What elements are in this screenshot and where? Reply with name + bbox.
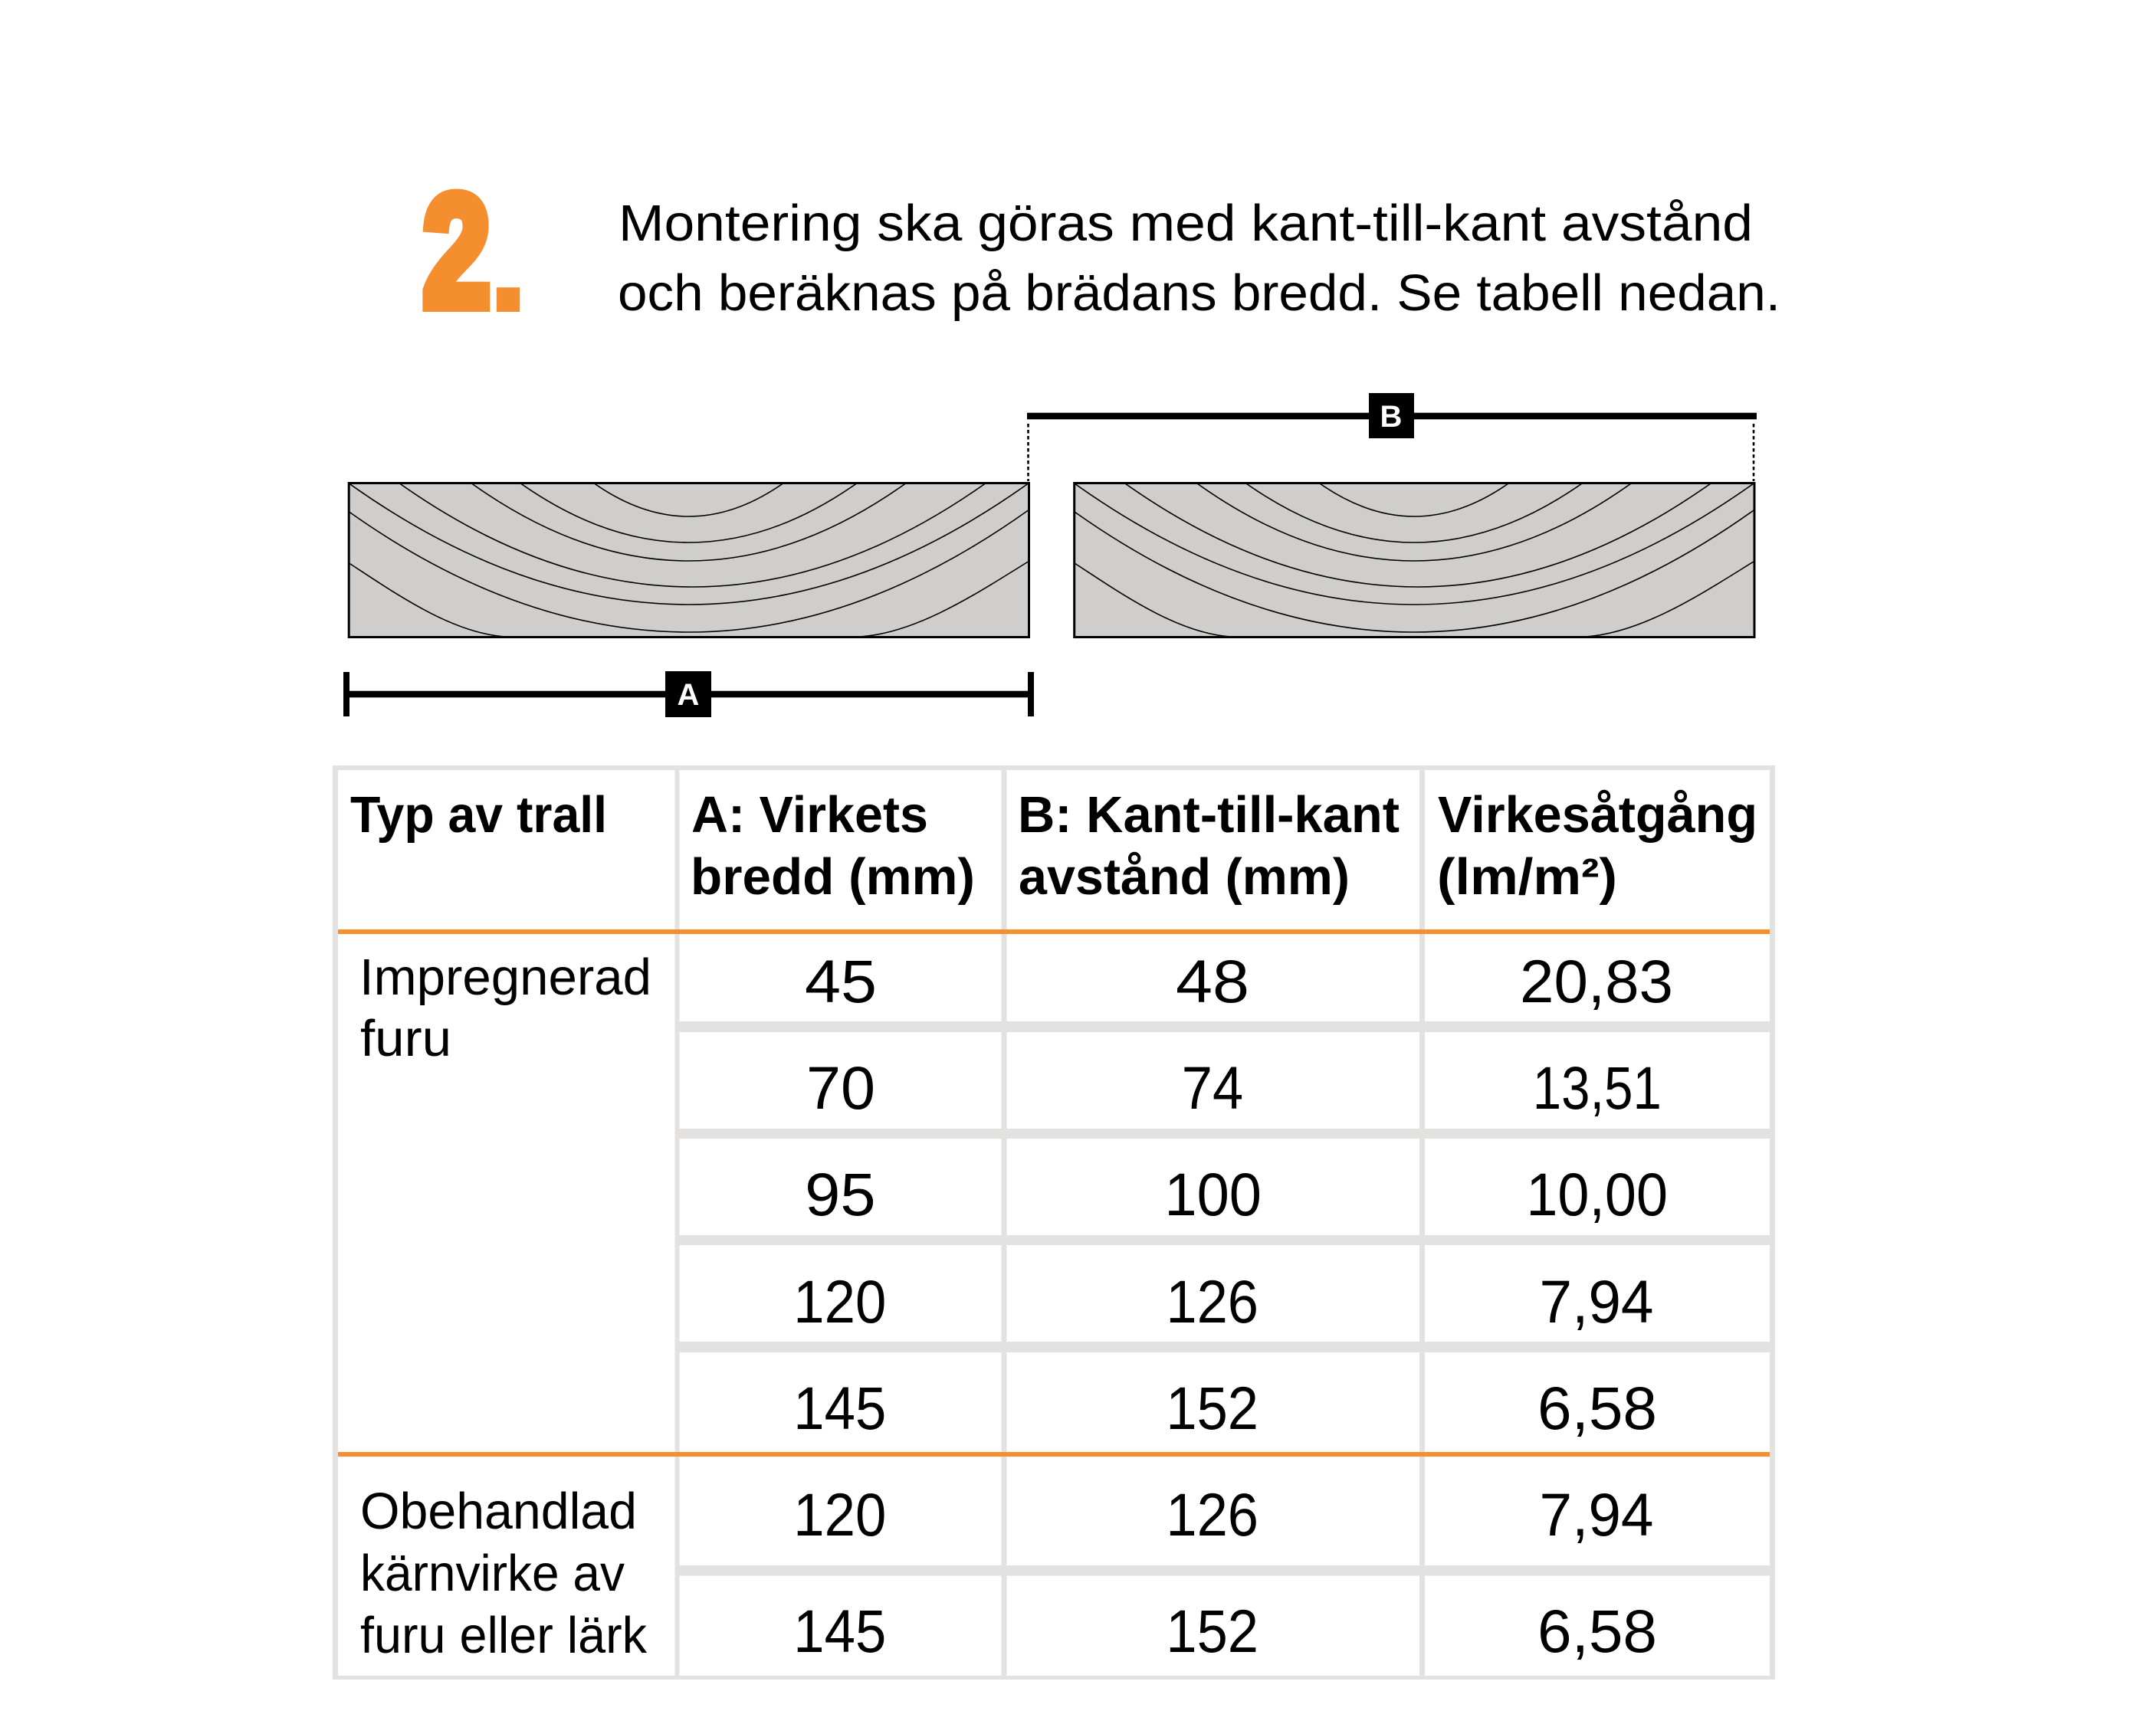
column A values: 120 xyxy=(793,1267,886,1336)
step number: 2 xyxy=(423,162,490,339)
intro text: och beräknas på brädans bredd. Se tabell nedan. xyxy=(618,264,1780,322)
table header: bredd (mm) xyxy=(691,848,975,906)
column B values: 74 xyxy=(1182,1054,1243,1122)
column B values: 152 xyxy=(1166,1374,1258,1442)
dimension A xyxy=(343,671,1034,717)
row labels: Obehandlad xyxy=(360,1483,637,1540)
column C values: 20,83 xyxy=(1520,947,1673,1015)
table header: avstånd (mm) xyxy=(1019,848,1350,906)
step number: . xyxy=(486,164,531,347)
table header: B: Kant-till-kant xyxy=(1018,786,1400,844)
column B values xyxy=(1164,947,1262,1665)
column A values xyxy=(793,947,886,1665)
row labels: furu xyxy=(360,1010,451,1067)
column A values: 70 xyxy=(806,1054,875,1122)
table header: (lm/m²) xyxy=(1437,848,1617,906)
table xyxy=(333,765,1775,1680)
table grid xyxy=(333,765,1775,1680)
table header: Typ av trall xyxy=(350,786,607,844)
column C values: 13,51 xyxy=(1533,1054,1662,1122)
column A values: 95 xyxy=(805,1160,876,1228)
intro text: Montering ska göras med kant-till-kant avstånd xyxy=(619,195,1753,252)
column C values: 10,00 xyxy=(1526,1160,1668,1228)
column B values: 100 xyxy=(1164,1160,1262,1228)
column B values: 126 xyxy=(1166,1480,1258,1549)
column A values: 145 xyxy=(793,1374,886,1442)
diagram: board B xyxy=(1075,483,1754,637)
table header: A: Virkets xyxy=(691,786,928,844)
row labels xyxy=(359,949,651,1664)
column A values: 120 xyxy=(793,1480,886,1549)
orange row rules xyxy=(338,929,1770,1457)
row labels: Impregnerad xyxy=(359,949,651,1006)
dimension A: A xyxy=(678,678,699,712)
step number xyxy=(423,162,531,347)
row labels: kärnvirke av xyxy=(360,1545,625,1602)
intro text xyxy=(618,195,1780,322)
dimension B xyxy=(1027,393,1757,481)
table header xyxy=(350,786,1757,906)
dimension B: B xyxy=(1380,400,1402,434)
column C values: 6,58 xyxy=(1537,1374,1657,1442)
column C values: 7,94 xyxy=(1539,1480,1654,1549)
column B values: 152 xyxy=(1166,1597,1258,1665)
row labels: furu eller lärk xyxy=(360,1607,647,1664)
column C values: 6,58 xyxy=(1537,1597,1657,1665)
column B values: 48 xyxy=(1176,947,1249,1015)
column B values: 126 xyxy=(1166,1267,1258,1336)
column C values: 7,94 xyxy=(1539,1267,1654,1336)
diagram: board A xyxy=(349,483,1029,637)
column A values: 145 xyxy=(793,1597,886,1665)
column C values xyxy=(1520,947,1673,1665)
table header: Virkesåtgång xyxy=(1438,786,1757,844)
column A values: 45 xyxy=(805,947,877,1015)
